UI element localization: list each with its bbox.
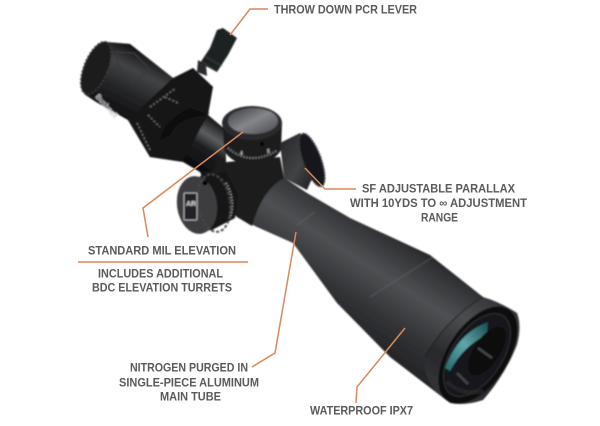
callout: parallax: WITH 10YDS TO ∞ ADJUSTMENT <box>350 196 528 210</box>
leader line: nitrogen <box>252 232 296 367</box>
rear silhouette <box>84 42 226 185</box>
callout: waterproof: WATERPROOF IPX7 <box>310 404 413 418</box>
throw down lever <box>178 28 237 107</box>
callout: parallax: RANGE <box>421 210 458 224</box>
magnification ring and collar <box>128 78 209 160</box>
eyepiece <box>74 38 173 120</box>
callout: parallax: SF ADJUSTABLE PARALLAX <box>362 182 515 196</box>
brand name: Bushnell <box>94 92 120 120</box>
callout: nitrogen purged: SINGLE-PIECE ALUMINUM <box>119 376 259 390</box>
objective lens <box>422 293 534 417</box>
divider: elevation callout <box>78 261 248 263</box>
callout: BDC turrets: BDC ELEVATION TURRETS <box>92 280 232 294</box>
front tube and objective bell <box>237 170 520 404</box>
callout: BDC turrets <box>92 266 232 294</box>
leader line: elevation <box>143 132 243 237</box>
windage turret <box>173 172 238 237</box>
callout: nitrogen purged: MAIN TUBE <box>160 390 221 404</box>
rifle scope illustration <box>74 28 534 417</box>
AR badge: AR <box>186 201 196 208</box>
callout: throw down lever: THROW DOWN PCR LEVER <box>274 2 417 16</box>
callout: nitrogen purged <box>119 360 259 404</box>
parallax knob <box>280 131 330 190</box>
callout: nitrogen purged: NITROGEN PURGED IN <box>130 360 248 374</box>
main tube rear section <box>170 115 226 172</box>
leader line: parallax <box>305 168 356 189</box>
elevation turret: 5 <box>267 149 270 155</box>
leader line: waterproof <box>356 328 405 403</box>
callout: parallax <box>350 182 528 224</box>
elevation turret <box>222 106 282 164</box>
callout: BDC turrets: INCLUDES ADDITIONAL <box>98 266 223 280</box>
callout: standard mil elevation: STANDARD MIL ELEVATION <box>88 244 236 258</box>
leader line: lever <box>230 9 268 35</box>
central saddle <box>205 157 284 226</box>
turret numbers: 4 <box>240 151 243 157</box>
